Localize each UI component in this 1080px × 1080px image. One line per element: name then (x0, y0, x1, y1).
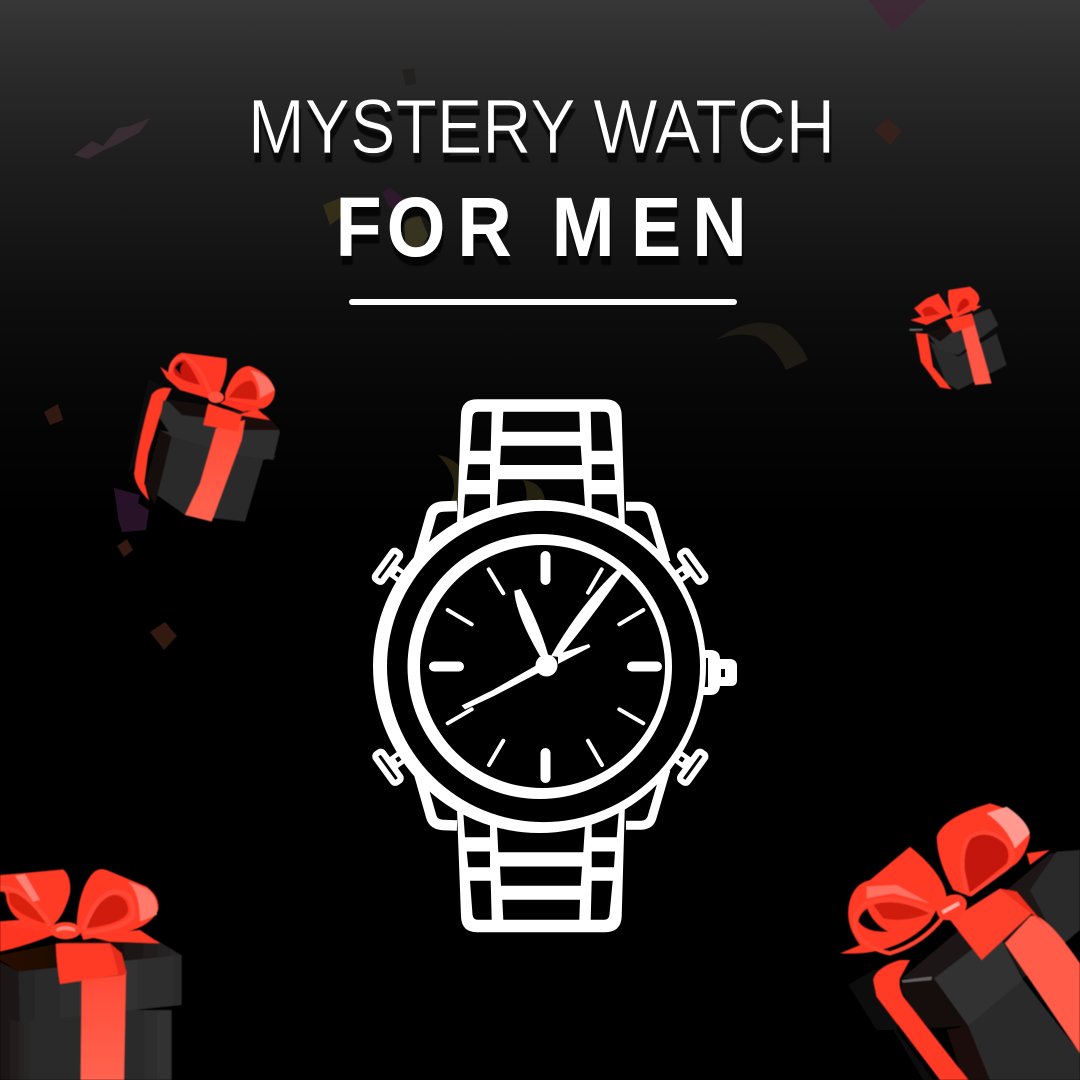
title: MYSTERY WATCH: MYSTERY WATCH (248, 84, 835, 170)
divider line (349, 299, 737, 305)
gift box: left middle (128, 353, 280, 522)
minute ticks (448, 569, 643, 765)
gift box: bottom left (0, 869, 183, 1080)
confetti (44, 0, 926, 650)
clock hands (462, 570, 622, 710)
bottom strap (457, 802, 625, 932)
top strap (457, 399, 625, 530)
lugs (417, 506, 666, 826)
hour ticks (434, 556, 657, 778)
outer bezel ring (373, 500, 706, 833)
title: FOR MEN: FOR MEN (336, 180, 747, 274)
watch icon (373, 399, 737, 932)
crown (702, 650, 737, 695)
gift box: bottom right (840, 803, 1080, 1080)
side buttons (374, 549, 707, 784)
inner dial ring (408, 534, 672, 799)
gift box: top right (909, 287, 1007, 390)
